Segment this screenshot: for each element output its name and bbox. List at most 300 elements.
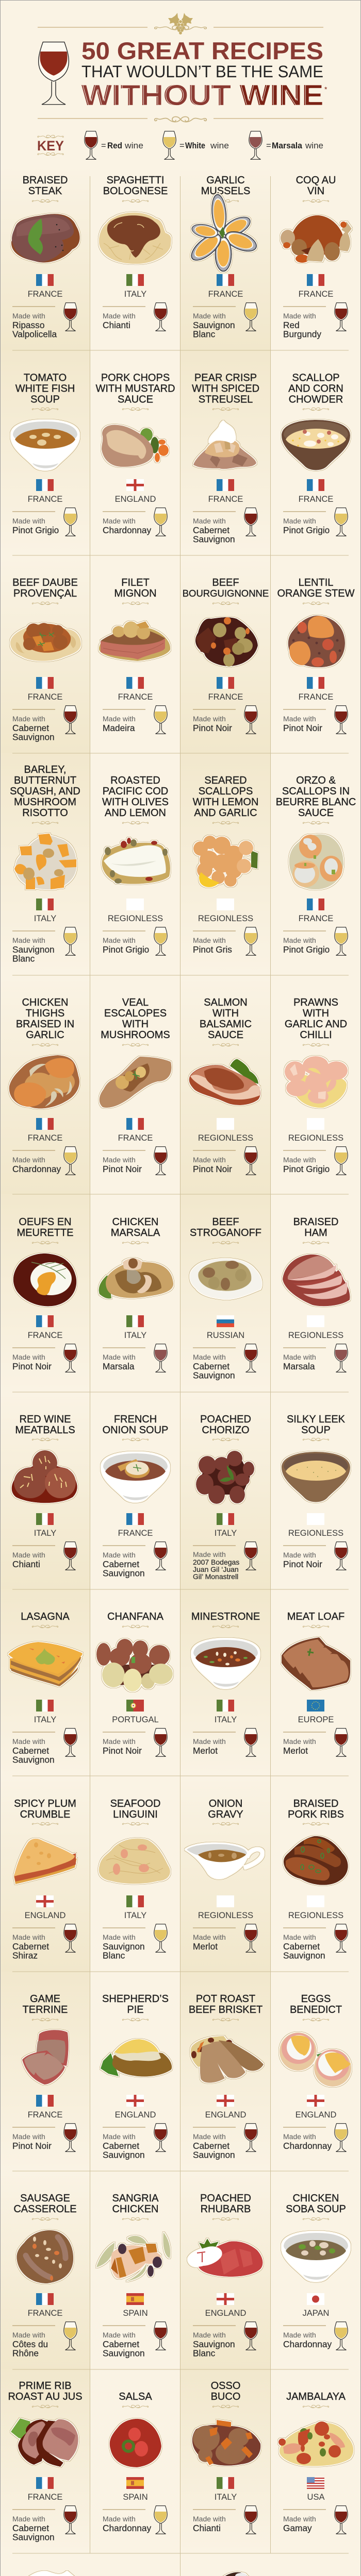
- wine pairing text: Made with: [103, 1551, 136, 1559]
- dish title: COQ AU: [296, 175, 336, 186]
- wine pairing text: Red: [283, 320, 300, 330]
- wine pairing text: Chardonnay: [103, 2523, 152, 2533]
- cell: Oeufs en Meurette: [12, 1216, 77, 1372]
- cell: Pot Roast Beef Brisket: [189, 1993, 264, 2160]
- cell: Filet Mignon: [99, 577, 170, 734]
- flag: [307, 2293, 324, 2305]
- wine pairing text: Blanc: [193, 329, 216, 339]
- dish title: CHILLI: [300, 1029, 332, 1041]
- dish title: THIGHS: [26, 1008, 64, 1019]
- dish title: PRAWNS: [293, 997, 338, 1008]
- dish title: WITH: [303, 1008, 329, 1019]
- illustration: orzo and scallops: [289, 834, 343, 889]
- dish title: SALSA: [119, 2391, 152, 2402]
- wine pairing text: Sauvignon: [193, 534, 235, 544]
- cell: Prime Rib Roast: [8, 2380, 83, 2542]
- wine pairing text: Pinot Noir: [12, 2141, 52, 2151]
- dish title: WHITE FISH: [15, 383, 75, 395]
- flag: [126, 2293, 144, 2305]
- dish title: CHICKEN: [112, 2204, 159, 2215]
- icon: red wine glass: [64, 2124, 77, 2151]
- cell: Barley Risotto: [10, 764, 80, 963]
- wine pairing text: Cabernet: [193, 1361, 229, 1371]
- icon: red wine glass: [244, 1147, 257, 1175]
- icon: white wine glass: [64, 508, 77, 536]
- wine pairing text: Cabernet: [103, 2141, 139, 2151]
- country: FRANCE: [28, 290, 62, 299]
- illustration: braised steak: [11, 214, 80, 263]
- cell: Chanfana: [96, 1611, 173, 1756]
- dish title: ROAST AU JUS: [8, 2391, 83, 2402]
- wine pairing text: Pinot Grigio: [12, 525, 59, 535]
- illustration: meat loaf: [282, 1637, 350, 1690]
- icon: white wine glass: [244, 927, 257, 955]
- dish title: MUSHROOM: [14, 796, 76, 808]
- wine pairing text: Sauvignon: [283, 1951, 325, 1961]
- illustration: shepherd's pie: [101, 2039, 172, 2077]
- cell: Beef Stroganoff: [190, 1216, 261, 1381]
- wine pairing text: Burgundy: [283, 329, 321, 339]
- country: ENGLAND: [296, 2110, 336, 2120]
- illustration: pear crisp: [193, 421, 256, 469]
- wine pairing text: Made with: [12, 1156, 45, 1164]
- wine pairing text: Marsala: [103, 1361, 135, 1371]
- wine pairing text: Pinot Noir: [103, 1745, 142, 1756]
- icon: marsala wine glass: [335, 1344, 348, 1372]
- dish title: CHICKEN: [22, 997, 69, 1008]
- wine pairing text: Cabernet: [103, 1559, 139, 1569]
- wine pairing text: Cabernet: [12, 2523, 49, 2533]
- title line 3: WITHOUT WINE: [83, 79, 325, 112]
- country: REGIONLESS: [198, 1133, 253, 1143]
- illustration: salmon: [189, 1059, 260, 1105]
- flag: [307, 2477, 324, 2489]
- icon: red wine glass: [154, 2322, 167, 2350]
- wine pairing text: Sauvignon: [12, 1755, 55, 1765]
- flag: [36, 2293, 54, 2305]
- cell: Salsa: [103, 2391, 167, 2534]
- country: ITALY: [124, 1911, 146, 1920]
- key: red wine: Red: [107, 141, 122, 150]
- illustration: game terrine: [22, 2030, 69, 2084]
- illustration: garlic mussels: [187, 193, 260, 272]
- key: white wine: [163, 131, 229, 159]
- illustration: chicken thighs: [9, 1055, 79, 1109]
- illustration: meatballs: [12, 1450, 77, 1503]
- illustration: chowder bowl: [282, 420, 350, 470]
- country: EUROPE: [298, 1715, 334, 1724]
- dish title: POACHED: [200, 2193, 251, 2204]
- dish title: SPICY PLUM: [14, 1798, 76, 1809]
- wine pairing text: Cabernet: [283, 1941, 320, 1952]
- flag: [307, 677, 324, 689]
- wine pairing text: Sauvignon: [193, 320, 235, 330]
- cell: Eggs Benedict: [280, 1993, 351, 2151]
- wine pairing text: Made with: [12, 2515, 45, 2523]
- wine pairing text: Pinot Noir: [12, 1361, 52, 1371]
- country: FRANCE: [28, 1331, 62, 1340]
- icon: red wine glass: [244, 2506, 257, 2534]
- wine pairing text: Made with: [283, 1933, 316, 1941]
- icon: white wine glass: [64, 927, 77, 955]
- wine pairing text: Gil’ Monastrell: [193, 1572, 238, 1581]
- cell: Prawns with Garlic and Chilli: [283, 997, 348, 1175]
- country: JAPAN: [303, 2309, 329, 2318]
- illustration: chocolate cake: [200, 2572, 263, 2576]
- flag: [126, 899, 144, 910]
- flag: [217, 1513, 234, 1525]
- wine pairing text: Made with: [12, 1933, 45, 1941]
- wine pairing text: Cabernet: [103, 2339, 139, 2349]
- dish title: AND LEMON: [105, 807, 166, 819]
- dish title: GRAVY: [208, 1809, 243, 1820]
- icon: red wine glass: [154, 1728, 167, 1756]
- cell: Garlic Mussels: [187, 175, 260, 339]
- dish title: GARLIC AND: [285, 1019, 347, 1030]
- country: FRANCE: [28, 495, 62, 504]
- wine pairing text: Cabernet: [12, 1745, 49, 1756]
- cell: Coq au Vin: [281, 175, 352, 339]
- flag: [126, 1513, 144, 1525]
- wine pairing text: Made with: [283, 2132, 316, 2141]
- cell: French Onion Soup: [101, 1414, 170, 1579]
- illustration: coq au vin: [281, 215, 352, 263]
- illustration: pot roast: [191, 2036, 264, 2083]
- wine pairing text: Sauvignon: [193, 2149, 235, 2160]
- dish title: BEEF BRISKET: [189, 2004, 262, 2015]
- wine pairing text: Marsala: [283, 1361, 315, 1371]
- wine pairing text: Pinot Gris: [193, 944, 232, 955]
- wine pairing text: Ripasso: [12, 320, 44, 330]
- flag: [217, 1118, 234, 1130]
- dish title: CRUMBLE: [20, 1809, 70, 1820]
- dish title: ONION SOUP: [103, 1425, 168, 1436]
- cell: Minestrone: [191, 1611, 260, 1756]
- icon: red wine glass: [64, 1728, 77, 1756]
- illustration: prime rib: [11, 2418, 78, 2467]
- dish title: MEURETTE: [17, 1227, 73, 1239]
- dish title: MINESTRONE: [191, 1611, 260, 1622]
- dish title: RISOTTO: [22, 807, 68, 819]
- country: ITALY: [34, 1715, 56, 1724]
- icon: white wine glass: [335, 927, 348, 955]
- country: FRANCE: [299, 692, 333, 702]
- wine pairing text: Chianti: [103, 320, 130, 330]
- wine pairing text: Pinot Noir: [283, 1559, 322, 1569]
- wine pairing text: Made with: [193, 2132, 226, 2141]
- country: ITALY: [34, 914, 56, 923]
- country: ENGLAND: [205, 2309, 246, 2318]
- dish title: SQUASH, AND: [10, 786, 80, 797]
- illustration: poached rhubarb: [188, 2239, 262, 2277]
- wine pairing text: Made with: [193, 312, 226, 320]
- wine pairing text: Sauvignon: [193, 1370, 235, 1381]
- dish title: BUTTERNUT: [14, 775, 76, 786]
- icon: red wine glass: [64, 303, 77, 331]
- dish title: BUCO: [211, 2391, 240, 2402]
- wine pairing text: Made with: [283, 312, 316, 320]
- dish title: TOMATO: [24, 372, 67, 383]
- dish title: SCALLOP: [292, 372, 340, 383]
- illustration: barley risotto: [14, 834, 76, 889]
- dish title: OSSO: [211, 2380, 240, 2392]
- dish title: MEAT LOAF: [287, 1611, 344, 1622]
- dish title: SAUSAGE: [20, 2193, 70, 2204]
- dish title: CHANFANA: [107, 1611, 164, 1622]
- flag: [126, 479, 144, 491]
- flag: [36, 677, 54, 689]
- cell: Braised Steak: [11, 175, 80, 339]
- dish title: BARLEY,: [24, 764, 66, 775]
- key: marsala wine: wine: [305, 141, 323, 150]
- cell: Silky Leek Soup: [282, 1414, 350, 1570]
- wine pairing text: Made with: [193, 517, 226, 525]
- wine pairing text: Made with: [103, 2515, 136, 2523]
- cell: Chocolate Red Wine Cake: [193, 2572, 348, 2576]
- cell: Pork Chops with Mustard Sauce: [95, 372, 175, 536]
- icon: red wine glass: [244, 1924, 257, 1952]
- dish title: STROGANOFF: [190, 1227, 261, 1239]
- country: FRANCE: [28, 2493, 62, 2502]
- dish title: SAUCE: [118, 394, 153, 405]
- cell: Beef Daube Provençal: [10, 577, 81, 742]
- dish title: MUSHROOMS: [101, 1029, 170, 1041]
- icon: red wine glass: [335, 1542, 348, 1570]
- country: FRANCE: [299, 914, 333, 923]
- illustration: sangria chicken: [96, 2232, 170, 2281]
- flag: [126, 2477, 144, 2489]
- dish title: STEAK: [28, 185, 62, 197]
- cell: Osso Buco: [192, 2380, 260, 2534]
- dish title: OEUFS EN: [19, 1216, 72, 1228]
- country: SPAIN: [123, 2493, 148, 2502]
- illustration: beef bourguignonne: [195, 617, 258, 667]
- wine pairing text: Sauvignon: [193, 2339, 235, 2349]
- dish title: BOURGUIGNONNE: [183, 588, 269, 599]
- dish title: JAMBALAYA: [286, 2391, 346, 2402]
- wine pairing text: Chardonnay: [283, 2141, 332, 2151]
- country: REGIONLESS: [288, 1331, 343, 1340]
- icon: white wine glass: [154, 1924, 167, 1952]
- country: ITALY: [215, 1529, 237, 1538]
- cell: Lasagna: [8, 1611, 83, 1765]
- dish title: WITH LEMON: [193, 796, 258, 808]
- dish title: SAUCE: [298, 807, 334, 819]
- illustration: salsa: [110, 2419, 161, 2467]
- key: white wine: White: [185, 141, 205, 150]
- cell: Red Wine Meatballs: [12, 1414, 77, 1570]
- icon: red wine glass: [64, 706, 77, 734]
- dish title: RED WINE: [20, 1414, 71, 1425]
- cell: Chicken Soba Soup: [282, 2193, 350, 2350]
- country: ITALY: [124, 1331, 146, 1340]
- country: ITALY: [124, 290, 146, 299]
- cell: Spaghetti Bolognese: [99, 175, 171, 331]
- icon: red wine glass: [244, 2124, 257, 2151]
- wine pairing text: Made with: [193, 936, 226, 944]
- icon: red wine glass: [335, 1924, 348, 1952]
- wine pairing text: Made with: [193, 1550, 226, 1558]
- key: red wine: wine: [124, 141, 143, 150]
- key: marsala wine: =: [266, 141, 271, 150]
- icon: red wine glass: [64, 2506, 77, 2534]
- dish title: SCALLOPS IN: [282, 786, 350, 797]
- wine pairing text: Made with: [103, 1933, 136, 1941]
- wine pairing text: Blanc: [12, 953, 35, 963]
- flag: [36, 1895, 54, 1907]
- wine pairing text: Blanc: [103, 1951, 125, 1961]
- dish title: RHUBARB: [201, 2204, 251, 2215]
- dish title: SOBA SOUP: [286, 2204, 346, 2215]
- flag: [126, 677, 144, 689]
- wine pairing text: Pinot Grigio: [283, 525, 330, 535]
- wine pairing text: Pinot Noir: [193, 1164, 232, 1174]
- key: [37, 131, 323, 159]
- flag: [217, 2477, 234, 2489]
- dish title: MARSALA: [111, 1227, 160, 1239]
- cell: Orzo and Scallops: [276, 775, 356, 955]
- dish title: AND GARLIC: [194, 807, 257, 819]
- country: SPAIN: [123, 2309, 148, 2318]
- dish title: SOUP: [301, 1425, 331, 1436]
- dish title: SILKY LEEK: [287, 1414, 345, 1425]
- wine pairing text: Made with: [193, 2331, 226, 2339]
- flag: [307, 1118, 324, 1130]
- wine pairing text: Cabernet: [193, 2141, 229, 2151]
- illustration: filet mignon: [99, 621, 170, 661]
- icon: white wine glass: [335, 1147, 348, 1175]
- title line 1: 50 GREAT RECIPES: [81, 37, 323, 64]
- flag: [36, 479, 54, 491]
- country: FRANCE: [208, 290, 243, 299]
- dish title: PACIFIC COD: [103, 786, 168, 797]
- flag: [307, 899, 324, 910]
- dish title: MEATBALLS: [15, 1425, 75, 1436]
- illustration: lentil stew: [288, 616, 345, 667]
- country: REGIONLESS: [288, 1911, 343, 1920]
- wine pairing text: Made with: [12, 2331, 45, 2339]
- dish title: BOLOGNESE: [103, 185, 168, 197]
- country: REGIONLESS: [198, 914, 253, 923]
- country: FRANCE: [299, 495, 333, 504]
- dish title: POT ROAST: [196, 1993, 255, 2005]
- flag: [217, 479, 234, 491]
- icon: red wine glass: [335, 1728, 348, 1756]
- flag: [307, 1895, 324, 1907]
- icon: red wine glass: [64, 1542, 77, 1570]
- icon: red wine glass: [244, 1728, 257, 1756]
- wine pairing text: Sauvignon: [103, 1568, 145, 1579]
- key: red wine: [85, 131, 143, 159]
- column shading: [0, 165, 271, 2553]
- wine pairing text: Made with: [283, 2331, 316, 2339]
- illustration: crab and scallop mornay: [18, 2571, 84, 2576]
- dish title: CHICKEN: [292, 2193, 339, 2204]
- illustration: seared scallops: [193, 836, 258, 887]
- dish title: CHORIZO: [202, 1425, 250, 1436]
- country: ITALY: [34, 1529, 56, 1538]
- dish title: SEAFOOD: [110, 1798, 160, 1809]
- dish title: PROVENÇAL: [13, 588, 77, 599]
- cell: Sausage Casserole: [12, 2193, 77, 2359]
- flag: [36, 1315, 54, 1327]
- wine pairing text: Juan Gil ‘Juan: [193, 1565, 239, 1573]
- dish title: CHOWDER: [289, 394, 343, 405]
- dish title: SHEPHERD’S: [102, 1993, 169, 2005]
- dish title: BRAISED: [293, 1216, 338, 1228]
- illustration: oeufs en meurette: [13, 1253, 76, 1306]
- flag: [126, 1315, 144, 1327]
- dish title: WITH OLIVES: [102, 796, 169, 808]
- dish title: TERRINE: [23, 2004, 68, 2015]
- flag: [217, 677, 234, 689]
- flag: [126, 2095, 144, 2107]
- dish title: MUSSELS: [201, 185, 250, 197]
- country: FRANCE: [299, 290, 333, 299]
- icon: red wine glass: [154, 1542, 167, 1570]
- illustration: leek soup bowl: [282, 1452, 350, 1502]
- dish title: SALMON: [204, 997, 248, 1008]
- flag: [126, 274, 144, 286]
- dish title: BENEDICT: [290, 2004, 342, 2015]
- wine pairing text: Côtes du: [12, 2339, 48, 2349]
- dish title: VIN: [307, 185, 324, 197]
- flag: [126, 1895, 144, 1907]
- wine pairing text: Sauvignon: [12, 2532, 55, 2542]
- wine pairing text: Made with: [12, 312, 45, 320]
- wine pairing text: Pinot Grigio: [283, 944, 330, 955]
- illustration: chanfana: [96, 1639, 173, 1691]
- icon: red wine glass: [154, 303, 167, 331]
- illustration: veal escalopes: [100, 1057, 172, 1108]
- dish title: BEEF: [212, 1216, 239, 1228]
- country: ENGLAND: [115, 2110, 156, 2120]
- title line 3: *: [324, 85, 327, 93]
- flag: [217, 1895, 234, 1907]
- icon: red wine glass: [335, 303, 348, 331]
- icon: red wine glass: [335, 2506, 348, 2534]
- dish title: GAME: [30, 1993, 60, 2005]
- illustration: eggs benedict: [280, 2032, 351, 2087]
- country: FRANCE: [118, 1529, 153, 1538]
- wine pairing text: Made with: [193, 1737, 226, 1745]
- flag: [126, 1700, 144, 1711]
- icon: red wine glass: [154, 1147, 167, 1175]
- illustration: cod: [102, 838, 170, 884]
- dish title: BRAISED IN: [16, 1019, 74, 1030]
- flag: [36, 274, 54, 286]
- wine pairing text: Made with: [103, 936, 136, 944]
- dish title: SOUP: [30, 394, 60, 405]
- country: FRANCE: [208, 495, 243, 504]
- illustration: plum crumble: [14, 1839, 77, 1884]
- flag: [217, 2293, 234, 2305]
- cell: Onion Gravy: [185, 1798, 262, 1952]
- country: FRANCE: [28, 1133, 62, 1143]
- cell: Pear Crisp with Spiced Streusel: [192, 372, 259, 544]
- wine pairing text: Made with: [283, 936, 316, 944]
- flag: [307, 1513, 324, 1525]
- illustration: pork chops: [102, 425, 169, 467]
- icon: large wine glass: [39, 42, 69, 105]
- wine pairing text: Made with: [12, 1737, 45, 1745]
- flag: [307, 274, 324, 286]
- title line 2: THAT WOULDN’T BE THE SAME: [81, 62, 323, 81]
- wine pairing text: Madeira: [103, 723, 135, 733]
- icon: red wine glass: [244, 1344, 257, 1372]
- flag: [217, 1700, 234, 1711]
- cell: Beef Bourguignonne: [183, 577, 269, 734]
